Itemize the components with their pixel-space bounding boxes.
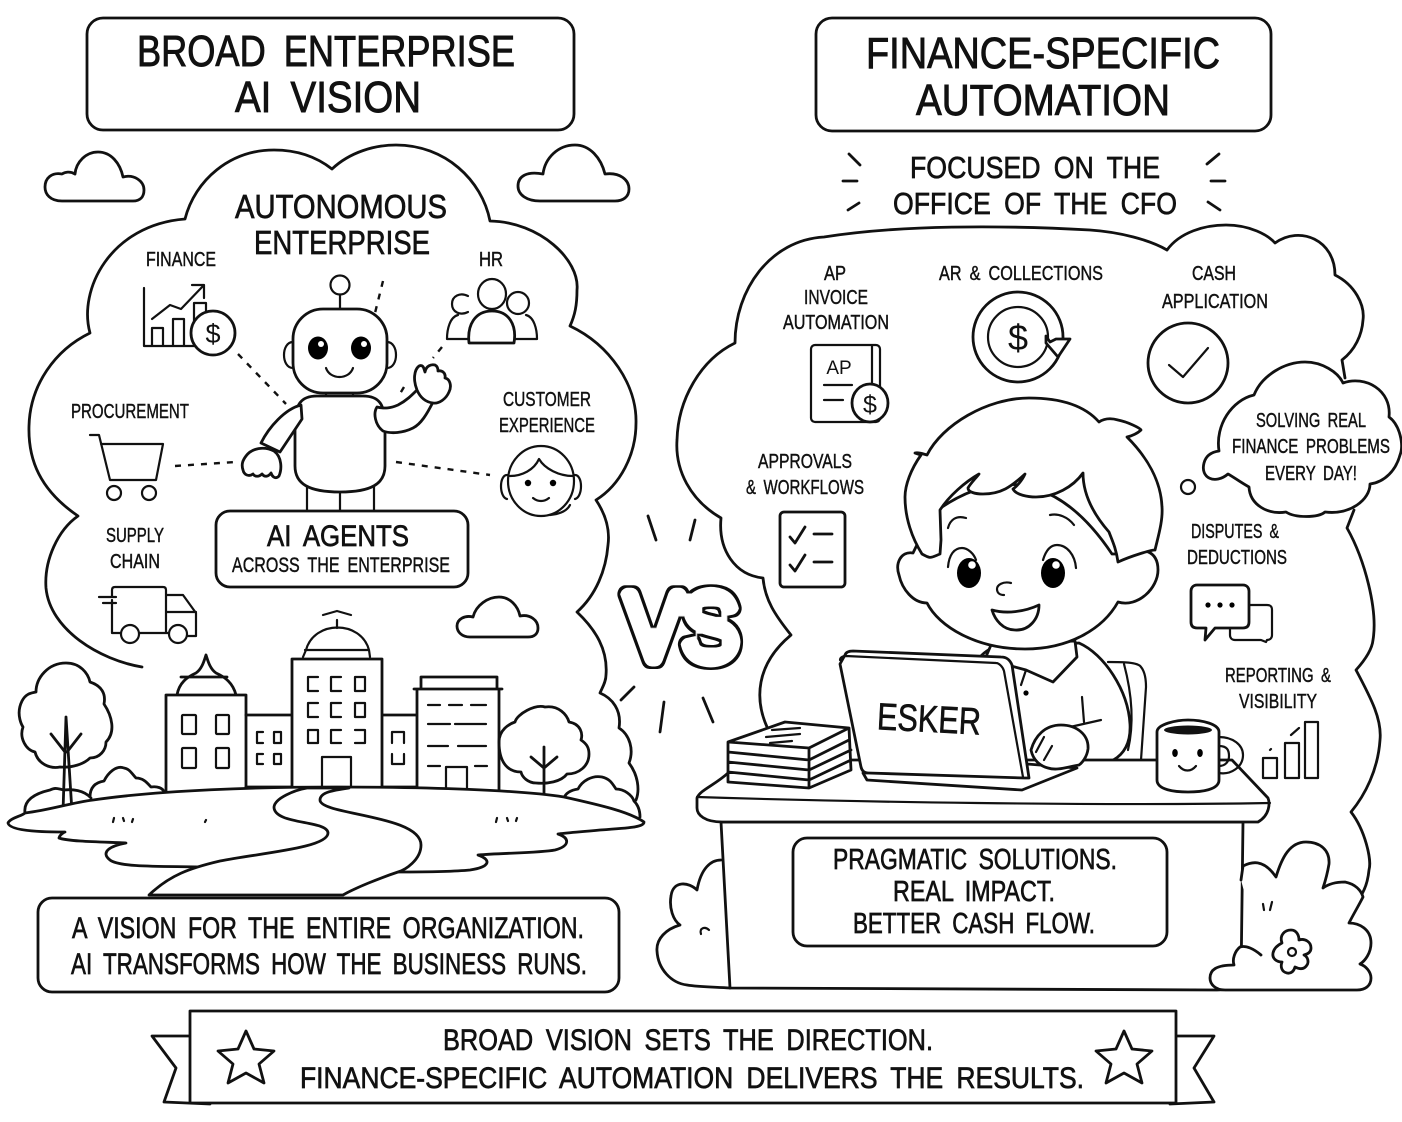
left title box: [87, 18, 574, 130]
left tree: [19, 663, 112, 812]
focused heading: OFFICE OF THE CFO: [893, 186, 1177, 221]
disputes icon: [1187, 520, 1287, 642]
boy: [898, 398, 1162, 768]
cloud right small: [518, 145, 629, 201]
paper stack: [728, 722, 851, 788]
ap invoice icon: INVOICE: [804, 286, 868, 309]
customer experience icon: EXPERIENCE: [499, 414, 595, 437]
reporting icon: REPORTING &: [1225, 664, 1331, 687]
ap invoice icon: AUTOMATION: [783, 311, 889, 334]
cash application icon: CASH: [1192, 262, 1236, 285]
ai agents box: ACROSS THE ENTERPRISE: [232, 554, 450, 577]
right title box: AUTOMATION: [916, 76, 1170, 125]
right thought cloud: [677, 225, 1380, 897]
right caption box: BETTER CASH FLOW.: [853, 908, 1095, 940]
vs: VS: [625, 574, 739, 681]
left caption box: AI TRANSFORMS HOW THE BUSINESS RUNS.: [71, 948, 587, 981]
left thought cloud: [29, 145, 638, 800]
approvals icon: & WORKFLOWS: [746, 476, 864, 499]
right title box: FINANCE-SPECIFIC: [866, 29, 1220, 78]
bushes right: [657, 842, 1371, 990]
ap invoice icon: AP: [824, 262, 846, 285]
small cloud: [457, 597, 538, 637]
ap invoice icon: $: [863, 391, 877, 419]
left title box: BROAD ENTERPRISE: [137, 27, 515, 76]
laptop: ESKER: [876, 696, 982, 744]
bushes: [25, 767, 640, 817]
hr icon: [447, 248, 537, 343]
coffee mug: [1157, 720, 1243, 792]
heading: autonomous enterprise: ENTERPRISE: [254, 224, 430, 261]
approvals icon: [746, 450, 864, 587]
bottom banner: [152, 1011, 1214, 1104]
left title box: AI VISION: [235, 73, 421, 122]
right title box: [816, 18, 1271, 131]
ar collections icon: AR & COLLECTIONS: [939, 262, 1103, 285]
speech cloud: EVERY DAY!: [1265, 462, 1357, 485]
laptop: [840, 651, 1088, 790]
hr icon: HR: [479, 248, 503, 271]
heading: autonomous enterprise: [235, 188, 447, 261]
right caption box: [793, 838, 1167, 946]
cloud left small: [45, 152, 144, 201]
desk: [697, 760, 1270, 990]
disputes icon: DISPUTES &: [1191, 520, 1279, 543]
supply chain icon: [99, 524, 196, 643]
finance icon: $: [205, 319, 221, 349]
finance icon: [144, 248, 235, 355]
focused heading: FOCUSED ON THE: [910, 150, 1160, 185]
reporting icon: VISIBILITY: [1239, 690, 1317, 713]
customer experience icon: CUSTOMER: [503, 388, 591, 411]
left caption box: A VISION FOR THE ENTIRE ORGANIZATION.: [72, 912, 584, 945]
buildings: [166, 611, 502, 792]
reporting icon: [1225, 664, 1331, 778]
supply chain icon: CHAIN: [110, 550, 160, 573]
bottom banner: BROAD VISION SETS THE DIRECTION.: [443, 1024, 933, 1057]
right caption box: PRAGMATIC SOLUTIONS.: [833, 844, 1117, 876]
ap invoice icon: [783, 262, 889, 422]
ai agents box: AI AGENTS: [267, 520, 409, 553]
star right: [1096, 1031, 1152, 1083]
ai agents box: [216, 511, 468, 587]
ar collections icon: [939, 262, 1103, 382]
right tree: [499, 706, 589, 797]
star left: [218, 1031, 274, 1083]
heading: autonomous enterprise: AUTONOMOUS: [235, 188, 447, 225]
approvals icon: APPROVALS: [758, 450, 852, 473]
finance icon: FINANCE: [146, 248, 216, 271]
vs: [621, 516, 739, 732]
dashed connectors: [175, 281, 490, 475]
ap invoice icon: AP: [826, 358, 852, 379]
focused heading: [843, 150, 1225, 221]
procurement icon: [71, 400, 189, 500]
cash application icon: APPLICATION: [1162, 290, 1268, 313]
ground and path: [8, 787, 644, 895]
left caption box: [38, 898, 619, 992]
right caption box: REAL IMPACT.: [893, 876, 1055, 908]
bottom banner: FINANCE-SPECIFIC AUTOMATION DELIVERS THE RESULTS.: [300, 1062, 1084, 1095]
cash application icon: [1148, 262, 1268, 403]
supply chain icon: SUPPLY: [106, 524, 164, 547]
procurement icon: PROCUREMENT: [71, 400, 189, 423]
robot: [242, 276, 450, 510]
disputes icon: DEDUCTIONS: [1187, 546, 1287, 569]
customer experience icon: [499, 388, 595, 516]
ar collections icon: $: [1008, 317, 1028, 358]
speech cloud: [1181, 362, 1402, 516]
